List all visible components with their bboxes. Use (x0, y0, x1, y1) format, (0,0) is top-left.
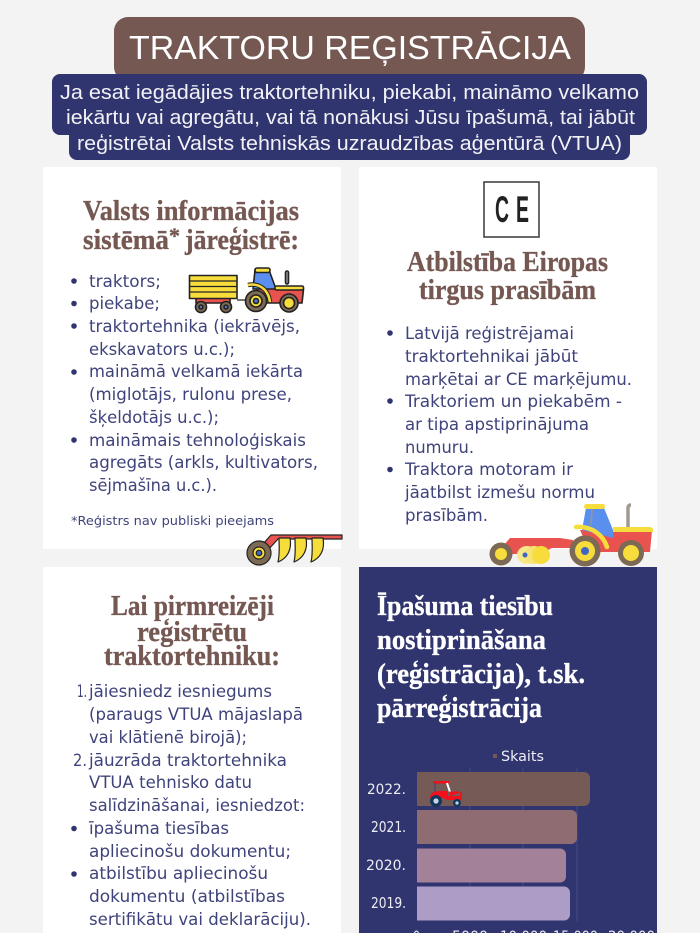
legend: Skaits (501, 749, 544, 765)
icon: tractor with tiller (490, 504, 653, 566)
heading: CE conformity: Atbilstība Eiropas (407, 247, 608, 278)
list: items to register: maināmā velkamā iekārta (89, 362, 303, 381)
heading: state information system (83, 196, 299, 256)
heading: ownership registration: Īpašuma tiesību (377, 591, 553, 622)
list: conformity requirements: marķētai ar CE marķējumu. (405, 370, 632, 389)
bar 2020 (366, 848, 566, 882)
heading: state information system: * (169, 223, 180, 248)
icon: CE mark (484, 182, 539, 237)
list: conformity requirements: ar tipa apstiprinājuma (405, 415, 589, 434)
list: registration steps: salīdzināšanai, iesniedzot: (89, 796, 305, 815)
intro text block: reģistrētai Valsts tehniskās uzraudzības aģentūrā (VTUA) (77, 133, 622, 155)
list: conformity requirements (387, 324, 632, 525)
heading: first registration: traktortehniku: (104, 641, 280, 672)
list: registration steps: jāiesniedz iesniegums (88, 682, 272, 701)
list: registration steps: vai klātienē birojā); (89, 728, 247, 747)
panel: first registration (43, 567, 341, 933)
list: registration steps (71, 682, 311, 929)
list: registration steps: apliecinošu dokumentu; (89, 842, 291, 861)
list: items to register: traktortehnika (iekrāvējs, (89, 317, 300, 336)
x axis labels (413, 929, 655, 933)
intro text block (52, 74, 647, 160)
list: registration steps: jāuzrāda traktortehnika (88, 751, 287, 770)
list: registration steps: 1. (77, 682, 87, 701)
heading: CE conformity (407, 247, 608, 306)
heading: state information system: sistēmā (83, 225, 169, 256)
list: items to register: agregāts (arkls, kultivators, (89, 453, 318, 472)
heading: CE conformity: tirgus prasībām (419, 275, 596, 306)
panel: CE conformity (359, 167, 657, 549)
list: items to register: (miglotājs, rulonu prese, (89, 385, 292, 404)
list: registration steps: VTUA tehnisko datu (89, 773, 252, 792)
list: registration steps: atbilstību apliecinošu (89, 864, 268, 883)
list: conformity requirements: traktortehnikai jābūt (405, 347, 579, 366)
list: registration steps: sertifikātu vai deklarāciju). (89, 910, 311, 929)
list: items to register: sējmašīna u.c.). (89, 476, 217, 495)
heading: ownership registration: (reģistrācija), t.sk. (377, 659, 585, 690)
list: conformity requirements: prasībām. (405, 506, 488, 525)
list: items to register: piekabe; (89, 294, 160, 313)
heading: ownership registration: nostiprināšana (377, 625, 546, 656)
list: registration steps: 2. (73, 751, 87, 770)
heading: first registration: reģistrētu (137, 617, 247, 648)
list: registration steps: dokumentu (atbilstības (89, 887, 285, 906)
list: items to register: maināmais tehnoloģiskais (89, 431, 306, 450)
list: registration steps: īpašuma tiesības (88, 819, 229, 838)
bar chart: registrations per year (366, 749, 655, 933)
heading: state information system: Valsts informācijas (83, 196, 299, 227)
title (114, 17, 585, 81)
bar 2020: 2020. (366, 858, 406, 874)
bar 2019 (371, 886, 570, 920)
bar 2021 (371, 810, 577, 844)
list: items to register: traktors; (89, 272, 161, 291)
bar 2022 (367, 772, 590, 806)
bar 2019: 2019. (371, 894, 406, 912)
title: TRAKTORU REĢISTRĀCIJA (129, 29, 571, 66)
heading: state information system: jāreģistrē: (184, 225, 299, 256)
panel: ownership registration (359, 567, 657, 933)
list: conformity requirements: Latvijā reģistrējamai (405, 324, 574, 343)
panel: state information system (43, 167, 341, 549)
heading: first registration (104, 591, 280, 672)
bar 2022: 2022. (367, 782, 406, 798)
list: registration steps: (paraugs VTUA mājaslapā (89, 705, 303, 724)
list: items to register: ekskavators u.c.); (89, 340, 235, 359)
icon: tractor with trailer (190, 268, 304, 312)
list: conformity requirements: Traktoriem un piekabēm - (404, 392, 622, 411)
list: conformity requirements: Traktora motoram ir (404, 460, 573, 479)
list: conformity requirements: jāatbilst izmešu normu (404, 483, 595, 502)
list: items to register (71, 272, 318, 495)
footnote: *Reģistrs nav publiski pieejams (71, 513, 274, 528)
heading: ownership registration (377, 591, 585, 724)
intro text block: iekārtu vai agregātu, vai tā nonākusi Jūsu īpašumā, tai jābūt (66, 107, 635, 129)
icon: small red tractor (430, 781, 462, 807)
heading: first registration: Lai pirmreizēji (111, 591, 274, 622)
icon: plough (247, 535, 342, 565)
icon: CE mark: E (516, 189, 529, 230)
intro text block: Ja esat iegādājies traktortehniku, piekabi, maināmo velkamo (60, 82, 639, 104)
icon: CE mark: C (495, 189, 509, 230)
bar 2021: 2021. (371, 818, 406, 836)
list: conformity requirements: numuru. (405, 438, 474, 457)
list: items to register: šķeldotājs u.c.); (89, 408, 219, 427)
heading: ownership registration: pārreģistrācija (377, 693, 542, 724)
